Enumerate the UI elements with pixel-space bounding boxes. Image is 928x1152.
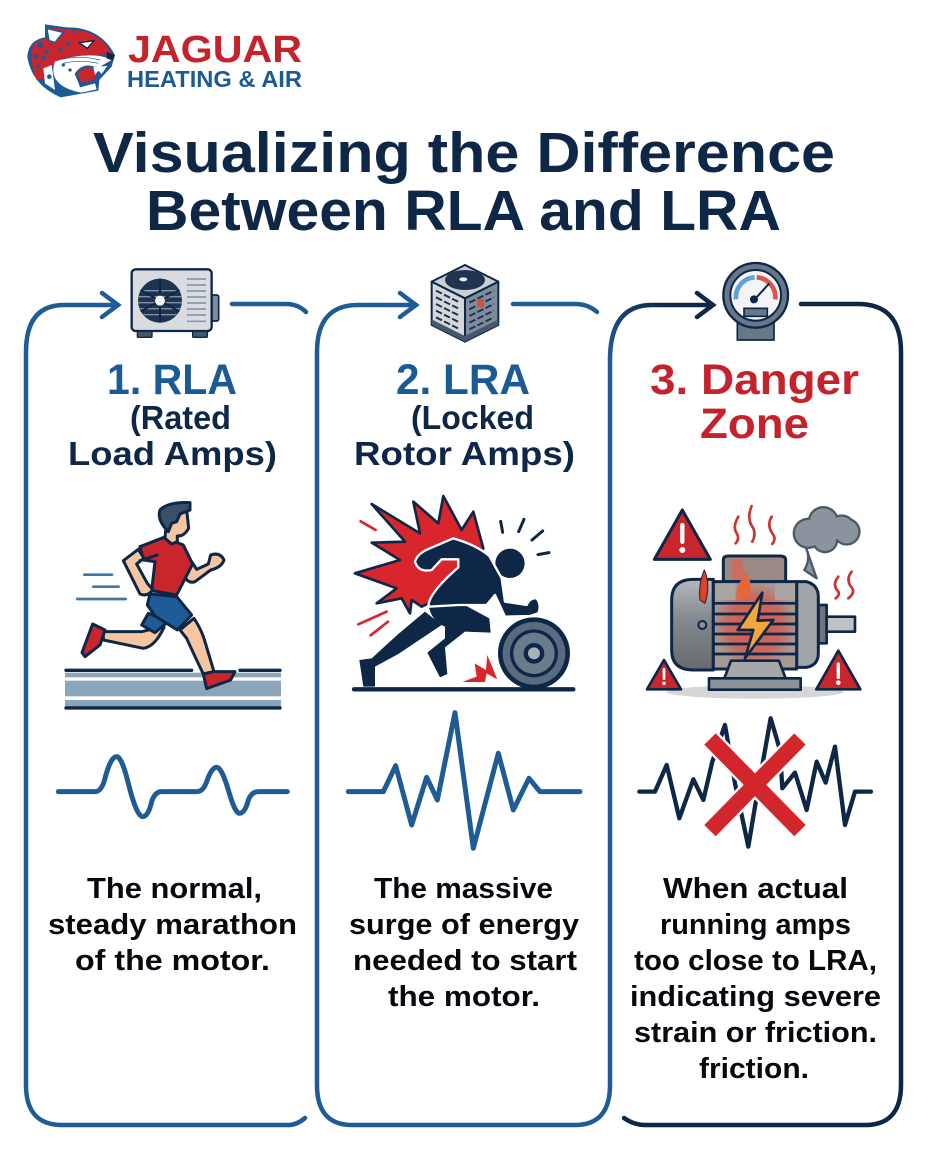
text: description 3: friction. xyxy=(699,1053,809,1085)
title: Between RLA and LRA xyxy=(146,179,781,243)
logo wordmark: JAGUAR xyxy=(128,29,302,71)
chart: LRA surge line xyxy=(348,713,580,848)
text: description 3: running amps xyxy=(660,909,851,941)
text: description 2: surge of energy xyxy=(349,909,579,941)
heading: 3. Danger Zone: 3. Danger xyxy=(650,356,859,404)
icon: warning triangle large xyxy=(654,510,710,559)
text: description 1: of the motor. xyxy=(75,945,270,977)
icon: outdoor AC unit xyxy=(132,269,219,337)
text: description 3: too close to LRA, xyxy=(634,945,877,977)
panel 1 frame and arrow xyxy=(26,293,306,1125)
text: description 2 xyxy=(349,873,579,1013)
icon: pressure gauge xyxy=(723,263,788,340)
text: description 2: The massive xyxy=(374,873,553,905)
panel 2 frame and arrow xyxy=(317,293,610,1125)
title xyxy=(93,121,835,243)
text: description 1: The normal, xyxy=(87,873,262,905)
subheading: Rated Load Amps xyxy=(68,399,277,472)
icon: smoke cloud xyxy=(793,506,861,578)
text: description 3: When actual xyxy=(663,873,848,905)
icon: warning triangle small xyxy=(647,660,681,689)
chart: steady pulse line xyxy=(58,757,287,817)
panel: 2. LRA xyxy=(317,265,610,1125)
text: description 3 xyxy=(630,873,881,1085)
heading: 3. Danger Zone xyxy=(650,356,859,448)
title: Visualizing the Difference xyxy=(93,121,835,185)
subheading: Rated Load Amps: (Rated xyxy=(130,399,231,436)
subheading: Rated Load Amps: Load Amps) xyxy=(68,435,277,472)
heading: 2. LRA: 2. LRA xyxy=(396,356,530,404)
illustration: overheating motor with warnings xyxy=(647,506,861,699)
panel 3 frame and arrow xyxy=(610,293,901,1125)
illustration: runner on track xyxy=(65,503,281,708)
logo tagline: HEATING & AIR xyxy=(127,66,302,92)
text: description 2: needed to start xyxy=(353,945,577,977)
panel: 1. RLA xyxy=(26,269,306,1125)
icon: warning triangle right xyxy=(816,651,860,689)
subheading: Locked Rotor Amps: (Locked xyxy=(411,399,534,436)
heading: 1. RLA: 1. RLA xyxy=(107,356,237,404)
text: description 1: steady marathon xyxy=(48,909,297,941)
illustration: person straining against wheel xyxy=(354,496,573,689)
icon: jaguar head xyxy=(27,24,115,97)
subheading: Locked Rotor Amps: Rotor Amps) xyxy=(354,435,575,472)
chart: erratic line crossed out xyxy=(639,718,871,847)
logo: Jaguar Heating & Air xyxy=(27,24,302,97)
text: description 2: the motor. xyxy=(388,981,540,1013)
text: description 3: indicating severe xyxy=(630,981,881,1013)
panel: 3. Danger Zone xyxy=(610,263,901,1125)
text: description 3: strain or friction. xyxy=(634,1017,877,1049)
heading: 3. Danger Zone: Zone xyxy=(700,400,809,448)
icon: condenser unit xyxy=(432,265,498,342)
subheading: Locked Rotor Amps xyxy=(354,399,575,472)
text: description 1 xyxy=(48,873,297,977)
